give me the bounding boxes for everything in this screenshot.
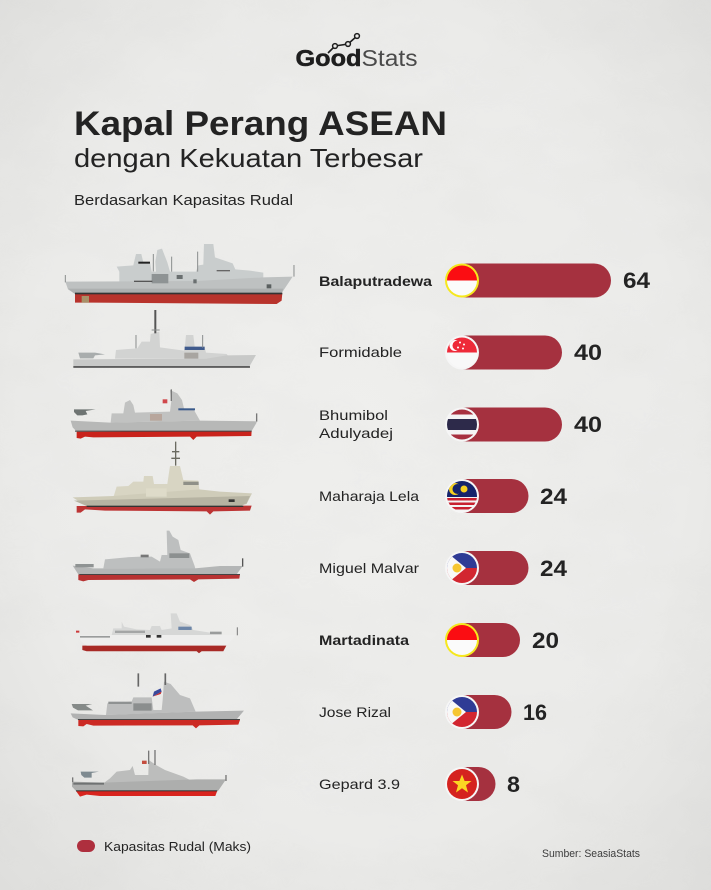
- ship: Gepard 3.9: [72, 750, 226, 797]
- bar: Balaputradewa 64: [450, 264, 611, 298]
- flag: Indonesia: [445, 264, 479, 298]
- bar: Miguel Malvar 24: [450, 551, 528, 585]
- bar: Martadinata 20: [450, 623, 520, 657]
- bar: Jose Rizal 16: [450, 695, 512, 729]
- legend: Kapasitas Rudal (Maks): [104, 839, 251, 854]
- label: Maharaja Lela: Maharaja Lela: [319, 488, 419, 504]
- value: 40: 40: [574, 412, 602, 437]
- value: 24: 24: [540, 484, 568, 509]
- flag: Philippines: [444, 550, 479, 586]
- label: Gepard 3.9: Gepard 3.9: [319, 776, 400, 792]
- flag: Singapore: [445, 336, 479, 370]
- flag: Indonesia: [445, 623, 479, 657]
- label: Bhumibol Adulyadej: [319, 407, 393, 441]
- label: Miguel Malvar: Miguel Malvar: [319, 560, 419, 576]
- ship: Miguel Malvar: [73, 531, 243, 582]
- title: Kapal Perang ASEAN: [74, 105, 447, 143]
- ship: Jose Rizal: [71, 673, 244, 728]
- label: Bhumibol Adulyadej: Adulyadej: [319, 425, 393, 441]
- ship: Maharaja Lela: [73, 442, 252, 515]
- description: Berdasarkan Kapasitas Rudal: [74, 192, 293, 209]
- source: Sumber: SeasiaStats: [542, 848, 640, 860]
- subtitle: dengan Kekuatan Terbesar: [74, 143, 423, 173]
- value: 8: 8: [507, 772, 520, 797]
- label: Balaputradewa: Balaputradewa: [319, 273, 432, 289]
- flag: Vietnam: [445, 767, 479, 801]
- value: 40: 40: [574, 340, 602, 365]
- ship: Martadinata: [76, 613, 237, 653]
- flag: Thailand: [445, 408, 479, 442]
- flag: Philippines: [444, 694, 479, 730]
- value: 20: 20: [532, 628, 559, 653]
- value: 16: 16: [523, 700, 547, 725]
- logo: GoodStats: [296, 34, 418, 71]
- logo: GoodStats: Stats: [362, 45, 418, 71]
- value: 64: 64: [623, 268, 651, 293]
- value: 24: 24: [540, 556, 568, 581]
- label: Martadinata: Martadinata: [319, 632, 409, 648]
- label: Formidable: Formidable: [319, 344, 402, 360]
- bar: Gepard 3.9 8: [450, 767, 496, 801]
- label: Bhumibol Adulyadej: Bhumibol: [319, 407, 388, 423]
- label: Jose Rizal: Jose Rizal: [319, 704, 391, 720]
- ship: Balaputradewa: [65, 244, 294, 304]
- bar: Bhumibol Adulyadej 40: [450, 408, 562, 442]
- bar: Maharaja Lela 24: [450, 479, 528, 513]
- ship: Bhumibol Adulyadej: [71, 389, 257, 440]
- ship: Formidable: [73, 310, 256, 368]
- bar: Formidable 40: [450, 336, 562, 370]
- flag: Malaysia: [445, 479, 479, 513]
- logo: GoodStats: Good: [296, 45, 362, 71]
